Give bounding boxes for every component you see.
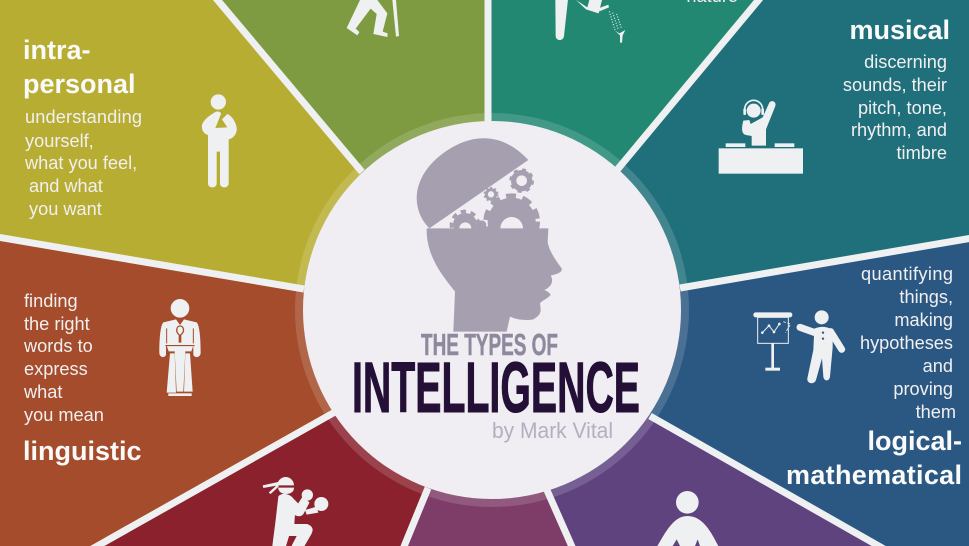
panel: bodily-kinesthetic wedge (92, 310, 492, 546)
icon: gardener with watering can (555, 0, 625, 43)
text and heading: linguistic: the right (24, 314, 90, 334)
heading and text: musical: sounds, their (843, 75, 947, 95)
text and heading: logical-mathematical: logical- (867, 426, 962, 456)
icon: seated figure (657, 491, 718, 546)
byline: by Mark Vital (492, 418, 613, 443)
text and heading: logical-mathematical: quantifying (861, 264, 953, 284)
text and heading: logical-mathematical: them (916, 402, 956, 422)
text and heading: logical-mathematical (786, 264, 962, 490)
title: intelligence: INTELLIGENCE (352, 349, 640, 428)
icon: head with gears (417, 138, 562, 332)
panel: intrapersonal wedge (0, 0, 492, 310)
text and heading: logical-mathematical: things, (899, 287, 953, 307)
heading and text: musical: pitch, tone, (858, 98, 947, 118)
text and heading: linguistic: what (23, 382, 62, 402)
icon: dj (719, 100, 803, 174)
heading and text: intrapersonal: intra- (23, 35, 90, 65)
text and heading: logical-mathematical: hypotheses (860, 333, 953, 353)
panel: spatial wedge (492, 310, 884, 546)
text and heading: logical-mathematical: making (894, 310, 953, 330)
panel: interpersonal wedge (403, 310, 573, 546)
heading and text: intrapersonal (23, 35, 142, 219)
heading and text: musical (843, 15, 950, 163)
text and heading: logical-mathematical: mathematical (786, 460, 962, 490)
text and heading: linguistic: words to (23, 336, 93, 356)
icon: thinker (202, 94, 237, 187)
panel: naturalist wedge (488, 0, 761, 310)
heading and text: musical: timbre (896, 143, 947, 163)
center ring (295, 113, 689, 507)
text and heading: logical-mathematical: proving (893, 379, 953, 399)
panel: linguistic wedge (0, 237, 492, 546)
heading and text: musical: discerning (864, 52, 947, 72)
text and heading: linguistic (23, 291, 142, 466)
heading and text: intrapersonal: personal (23, 69, 136, 99)
heading and text: intrapersonal: and what (29, 176, 103, 196)
panel: musical wedge (492, 0, 969, 310)
title: the types of: THE TYPES OF (421, 328, 558, 362)
heading and text: intrapersonal: understanding (25, 107, 142, 127)
heading and text: musical: rhythm, and (851, 120, 947, 140)
center circle (303, 121, 681, 499)
text and heading: linguistic: finding (24, 291, 78, 311)
panel: naturalistic-body wedge (215, 0, 492, 310)
heading and text: intrapersonal: you want (29, 199, 102, 219)
icon: presenter with chart (753, 310, 842, 383)
text and heading: linguistic: you mean (24, 405, 104, 425)
text and heading: linguistic: express (24, 359, 88, 379)
icon: speaker at podium (159, 299, 201, 396)
heading and text: intrapersonal: what you feel, (24, 153, 137, 173)
icon: hiker (347, 0, 399, 37)
heading and text: musical: musical (849, 15, 950, 45)
text and heading: logical-mathematical: and (923, 356, 953, 376)
panel: logical-mathematical wedge (492, 238, 969, 546)
text and heading: linguistic: linguistic (23, 436, 142, 466)
heading and text: intrapersonal: yourself, (25, 131, 94, 151)
icon: boxer (263, 477, 328, 546)
